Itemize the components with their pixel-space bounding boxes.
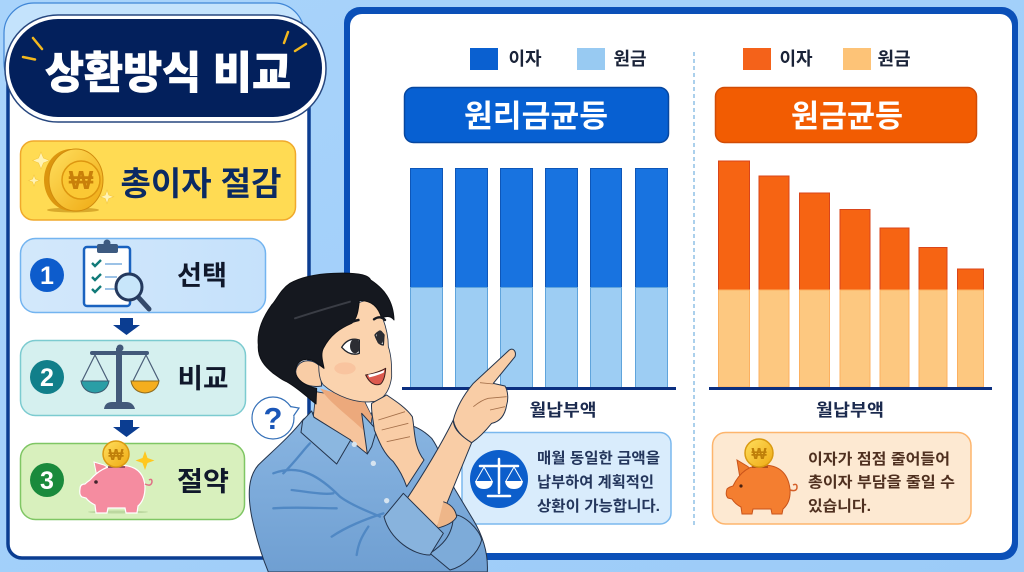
icon: pink piggy bank [80,441,154,514]
icon: pink piggy bank: ₩ [108,447,124,464]
character: man pointing at chart [249,273,515,572]
callout: equal principal: 이자가 점점 줄어들어 [808,451,950,468]
arrow: step 2 to 3 [113,420,140,437]
step 1: select: 선택 [177,261,227,291]
bar chart: equal payment: 월납부액 [530,401,596,420]
icon: clipboard and magnifier [84,240,149,309]
heading: equal principal [716,88,976,142]
callout: equal payment: 매월 동일한 금액을 [537,450,660,467]
callout: equal principal [712,432,971,524]
step 3: save [20,441,244,520]
savings banner: 총이자 절감 [120,165,282,202]
legend: right [743,48,911,70]
panel: left steps [4,3,326,558]
callout: equal payment: 상환이 가능합니다. [537,498,660,515]
step 3: save: 3 [40,467,54,495]
step 3: save: 절약 [177,467,229,497]
eyes and brows [333,317,385,354]
neck [313,392,372,454]
step 2: compare [20,340,246,416]
icon: question bubble [252,397,299,439]
thinking hand [371,395,424,487]
title pill [5,15,326,122]
title pill: 상환방식 비교 [45,49,291,98]
face [319,300,392,402]
bar chart: equal principal [709,161,992,420]
step 2: compare: 2 [40,364,54,392]
panel: right comparison [344,7,1018,560]
callout: equal payment [462,432,671,524]
pointing arm [405,420,472,528]
savings banner [20,141,296,220]
step 1: select [20,238,266,312]
step 1: select: 1 [40,262,54,290]
icon: gold coin: ₩ [69,165,94,195]
icon: orange piggy bank [726,439,797,514]
collar [301,411,351,464]
mouth [366,368,386,385]
callout: equal principal: 있습니다. [808,498,871,515]
sleeve cuff [384,493,443,555]
bar chart: equal principal: 월납부액 [816,401,884,420]
icon: gold coin [28,149,114,212]
arrow: step 1 to 2 [113,318,140,335]
rear rolled cuff [430,515,482,570]
icon: scale badge [470,450,528,508]
legend: left: 이자 [508,49,542,69]
shirt [249,410,487,572]
callout: equal payment: 납부하여 계획적인 [537,474,654,491]
bar chart: equal payment [402,168,676,420]
heading: equal payment: 원리금균등 [464,99,608,134]
icon: question bubble: ? [264,401,282,436]
icon: orange piggy bank: ₩ [751,446,767,463]
legend: right: 원금 [877,49,911,69]
legend: left: 원금 [613,49,647,69]
legend: right: 이자 [779,49,813,69]
step 2: compare: 비교 [178,364,228,394]
hair [258,273,394,404]
ear [296,361,322,386]
heading: equal principal: 원금균등 [791,99,903,134]
divider [693,52,695,525]
icon: balance scale [81,344,159,409]
legend: left [470,48,647,70]
callout: equal principal: 총이자 부담을 줄일 수 [808,474,955,491]
pointing hand [453,349,515,443]
heading: equal payment [404,88,668,142]
